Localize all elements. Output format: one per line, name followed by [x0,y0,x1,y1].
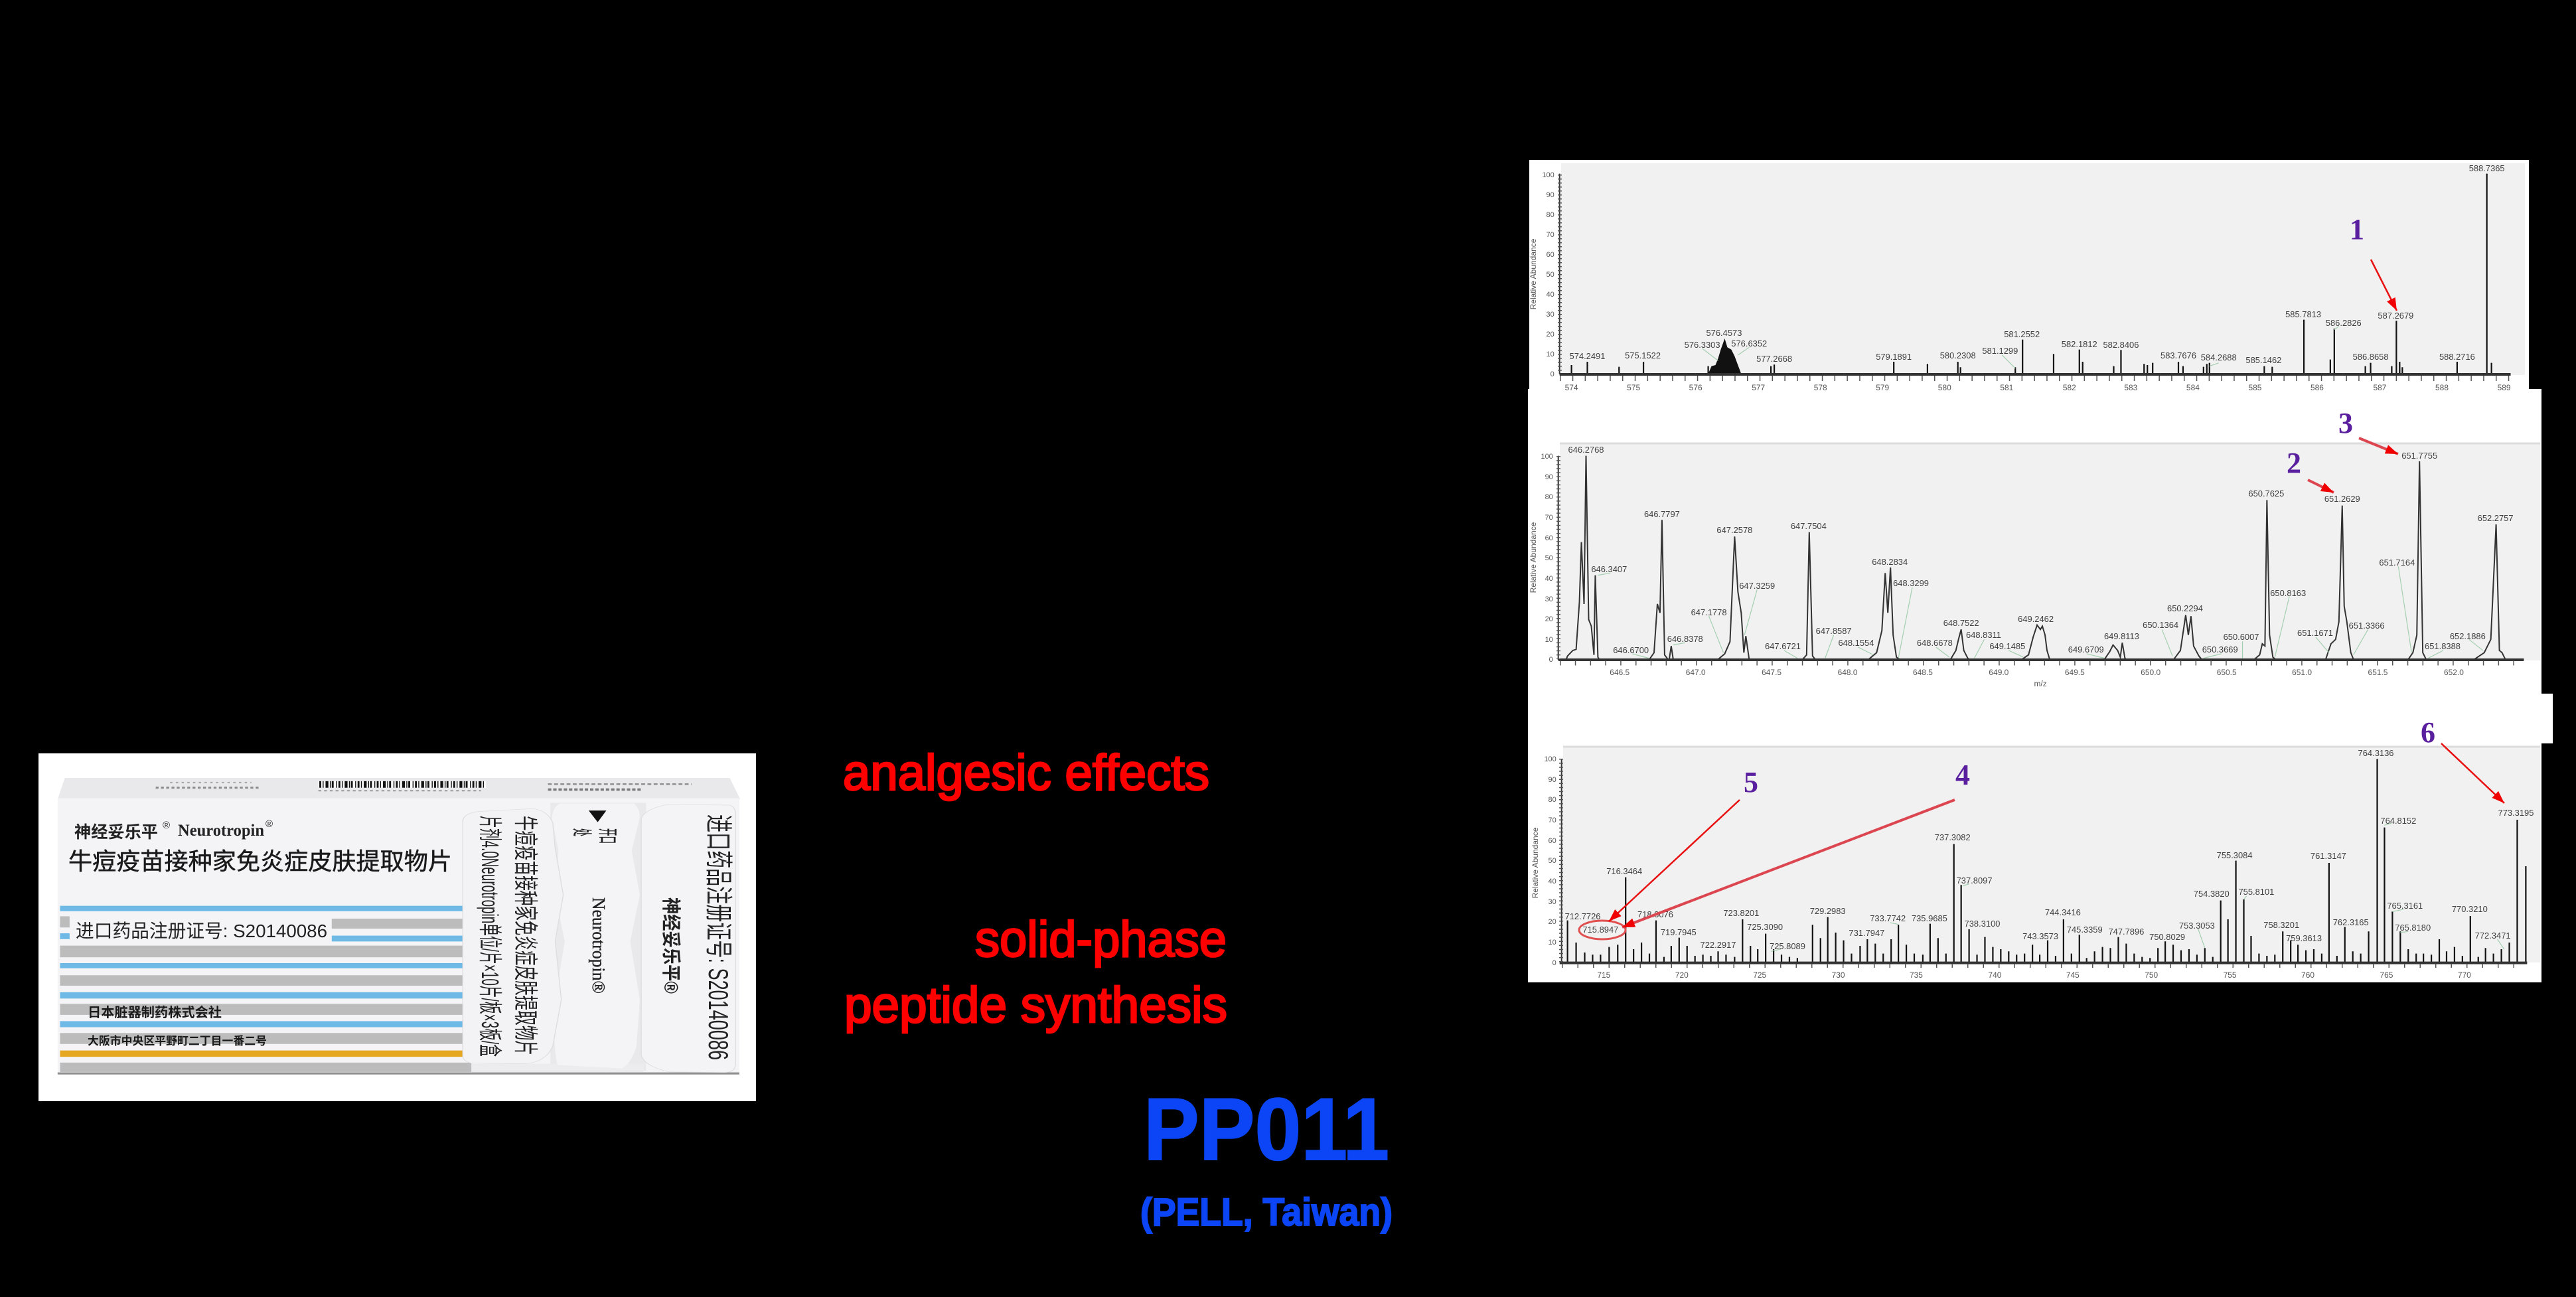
chart: mass spectrum 2 (m/z 646-652): 647.7504 [1791,521,1827,531]
chart: mass spectrum 1 (m/z 574-589): 579 [1876,383,1890,392]
chart: mass spectrum 2 (m/z 646-652): 647.5 [1762,668,1781,677]
chart: mass spectrum 1 (m/z 574-589): 60 [1547,251,1554,259]
chart: mass spectrum 3 (m/z 715-773): 765.8180 [2395,923,2431,933]
chart: mass spectrum 2 (m/z 646-652): 20 [1545,615,1553,623]
callout: peak 1: 1 [2350,213,2364,246]
chart: mass spectrum 3 (m/z 715-773): 80 [1549,796,1556,804]
chart: mass spectrum 3 (m/z 715-773): 100 [1544,755,1556,763]
flap text: product name: 牛痘疫苗接种家免炎症皮肤提取物片 [512,816,539,1055]
chart: mass spectrum 2 (m/z 646-652): 650.3669 [2202,645,2238,654]
chart: mass spectrum 3 (m/z 715-773): 735 [1910,970,1923,980]
callout: peak 2 [2287,447,2334,493]
chart: mass spectrum 1 (m/z 574-589): 586 [2311,383,2324,392]
chart: mass spectrum 3 (m/z 715-773): 754.3820 [2194,889,2230,899]
chart: mass spectrum 2 (m/z 646-652): 650.2294 [2167,603,2203,613]
subtitle: PELL, Taiwan: (PELL, Taiwan) [1140,1191,1393,1234]
chart: mass spectrum 2 (m/z 646-652): 652.1886 [2450,631,2486,641]
chart: mass spectrum 3 (m/z 715-773): 770 [2458,970,2471,980]
callout: peak 5 [1609,766,1758,921]
callout: peak 5: 5 [1744,766,1758,799]
chart: mass spectrum 2 (m/z 646-652): 648.3299 [1893,578,1929,588]
chart: mass spectrum 2 (m/z 646-652): 650.0 [2141,668,2161,677]
chart: mass spectrum 3 (m/z 715-773): 758.3201 [2263,920,2299,930]
title: PP011: PP011 [1144,1081,1389,1179]
chart: mass spectrum 2 (m/z 646-652): 649.6709 [2068,645,2104,654]
chart: mass spectrum 3 (m/z 715-773): 750.8029 [2149,932,2185,942]
chart: mass spectrum 3 (m/z 715-773): 764.3136 [2358,748,2393,758]
chart: mass spectrum 1 (m/z 574-589): 585 [2248,383,2262,392]
chart: mass spectrum 2 (m/z 646-652): 649.5 [2065,668,2085,677]
chart: mass spectrum 2 (m/z 646-652): 651.5 [2368,668,2388,677]
chart: mass spectrum 3 (m/z 715-773): 20 [1549,918,1556,926]
chart: mass spectrum 3 (m/z 715-773): 762.3165 [2333,917,2369,927]
chart: mass spectrum 2 (m/z 646-652): 0 [1549,656,1553,664]
panel: mass spectra background [1528,160,2553,982]
callout: peak 4 [1622,759,1970,927]
chart: mass spectrum 2 (m/z 646-652): 652.2757 [2478,513,2514,523]
chart: mass spectrum 2 (m/z 646-652): 646.5 [1610,668,1630,677]
chart: mass spectrum 3 (m/z 715-773): 733.7742 [1870,913,1906,923]
chart: mass spectrum 3 (m/z 715-773): 723.8201 [1723,908,1759,918]
chart: mass spectrum 1 (m/z 574-589): 577.2668 [1756,354,1792,364]
chart: mass spectrum 1 (m/z 574-589): 582.1812 [2062,339,2097,349]
chart: mass spectrum 2 (m/z 646-652): m/z [2034,679,2047,688]
chart: mass spectrum 1 (m/z 574-589): 581.2552 [2004,329,2040,339]
chart: mass spectrum 3 (m/z 715-773): 718.3076 [1637,909,1673,919]
flap text: registration number: 进口药品注册证号: S20140086 [703,814,734,1060]
chart: mass spectrum 2 (m/z 646-652): 649.2462 [2018,614,2054,624]
chart: mass spectrum 3 (m/z 715-773): 715 [1597,970,1611,980]
chart: mass spectrum 1 (m/z 574-589): 587.2679 [2378,311,2413,321]
address: 大阪市中央区平野町二丁目一番二号 [88,1034,267,1047]
chart: mass spectrum 2 (m/z 646-652): 651.8388 [2425,641,2461,651]
chart: mass spectrum 1 (m/z 574-589): 0 [1551,370,1554,378]
chart: mass spectrum 3 (m/z 715-773): 760 [2301,970,2314,980]
chart: mass spectrum 1 (m/z 574-589): 586.2826 [2326,318,2362,328]
chart: mass spectrum 1 (m/z 574-589): 576.4573 [1706,328,1742,338]
callout: peak 6 [2421,716,2504,803]
callout: peak 3: 3 [2338,407,2353,439]
chart: mass spectrum 3 (m/z 715-773): 744.3416 [2045,907,2081,917]
chart: mass spectrum 1 (m/z 574-589): 30 [1547,311,1554,319]
chart: mass spectrum 2 (m/z 646-652): 652.0 [2444,668,2464,677]
brand name [74,818,273,842]
chart: mass spectrum 1 (m/z 574-589): 581.1299 [1982,346,2018,356]
text: solid-phase peptide synthesis [844,911,1227,1033]
chart: mass spectrum 3 (m/z 715-773): 722.2917 [1701,940,1736,950]
brand name: ® [163,820,170,831]
chart: mass spectrum 1 (m/z 574-589): Relative Abundance [1529,238,1538,309]
chart: mass spectrum 2 (m/z 646-652): 70 [1545,514,1553,522]
chart: mass spectrum 3 (m/z 715-773): 745.3359 [2067,925,2103,935]
chart: mass spectrum 3 (m/z 715-773): 764.8152 [2380,816,2416,826]
chart: mass spectrum 2 (m/z 646-652): 646.8378 [1667,634,1703,644]
chart: mass spectrum 3 (m/z 715-773): 737.3082 [1935,832,1971,842]
chart: mass spectrum 1 (m/z 574-589): 588.7365 [2469,163,2505,173]
chart: mass spectrum 1 (m/z 574-589): 586.8658 [2353,352,2389,362]
chart: mass spectrum 1 (m/z 574-589): 588.2716 [2439,352,2475,362]
chart: mass spectrum 2 (m/z 646-652): 648.5 [1913,668,1933,677]
flap text: Neurotropin: Neurotropin® [589,897,609,994]
chart: mass spectrum 3 (m/z 715-773): 725 [1753,970,1766,980]
chart: mass spectrum 2 (m/z 646-652): 651.0 [2292,668,2312,677]
chart: mass spectrum 3 (m/z 715-773): 772.3471 [2475,931,2511,941]
panel: Neurotropin medicine box photo: 开口 [596,828,618,844]
chart: mass spectrum 2 (m/z 646-652): 650.6007 [2224,632,2259,642]
chart: mass spectrum 3 (m/z 715-773): 731.7947 [1849,928,1884,938]
callout: peak 6: 6 [2421,716,2435,749]
chart: mass spectrum 1 (m/z 574-589): 589 [2498,383,2511,392]
chart: mass spectrum 1 (m/z 574-589): 581 [2000,383,2014,392]
chart: mass spectrum 3 (m/z 715-773): 40 [1549,877,1556,885]
chart: mass spectrum 3 (m/z 715-773): 773.3195 [2498,808,2534,818]
chart: mass spectrum 3 (m/z 715-773): 720 [1675,970,1689,980]
chart: mass spectrum 1 (m/z 574-589): 584 [2186,383,2200,392]
chart: mass spectrum 3 (m/z 715-773): 765 [2380,970,2393,980]
flap text: brand: 神经妥乐平® [660,897,682,994]
chart: mass spectrum 2 (m/z 646-652): 648.7522 [1943,618,1979,628]
chart: mass spectrum 3 (m/z 715-773): 759.3613 [2286,933,2322,943]
chart: mass spectrum 1 (m/z 574-589): 70 [1547,231,1554,239]
chart: mass spectrum 2 (m/z 646-652): 651.1671 [2297,628,2333,638]
chart: mass spectrum 3 (m/z 715-773): 729.2983 [1810,906,1846,916]
callout: circle around peak 5 [1579,921,1626,939]
callout: peak 3 [2338,407,2398,454]
chart: mass spectrum 3 (m/z 715-773): 735.9685 [1912,913,1947,923]
chart: mass spectrum 1 (m/z 574-589): 50 [1547,271,1554,279]
chart: mass spectrum 2 (m/z 646-652): 100 [1541,453,1553,461]
chart: mass spectrum 1 (m/z 574-589): 585.1462 [2245,355,2281,365]
brand name: Neurotropin [178,822,264,840]
chart: mass spectrum 2 (m/z 646-652): 648.1554 [1839,638,1874,648]
chart: mass spectrum 1 (m/z 574-589): 580.2308 [1940,350,1976,360]
flap text: open here [570,828,618,844]
chart: mass spectrum 3 (m/z 715-773): 761.3147 [2311,851,2346,861]
chart: mass spectrum 3 (m/z 715-773): 30 [1549,898,1556,906]
chart: mass spectrum 2 (m/z 646-652): 40 [1545,575,1553,583]
chart: mass spectrum 1 (m/z 574-589): 582 [2063,383,2076,392]
chart: mass spectrum 3 (m/z 715-773): Relative Abundance [1531,827,1540,898]
chart: mass spectrum 2 (m/z 646-652): 10 [1545,636,1553,644]
chart: mass spectrum 2 (m/z 646-652): 80 [1545,493,1553,501]
chart: mass spectrum 1 (m/z 574-589): 583 [2124,383,2138,392]
chart: mass spectrum 1 (m/z 574-589): 90 [1547,191,1554,199]
chart: mass spectrum 2 (m/z 646-652): 649.1485 [1989,641,2025,651]
chart: mass spectrum 1 (m/z 574-589): 578 [1814,383,1827,392]
chart: mass spectrum 3 (m/z 715-773): 716.3464 [1606,866,1642,876]
chart: mass spectrum 2 (m/z 646-652): 90 [1545,473,1553,481]
chart: mass spectrum 1 (m/z 574-589): 580 [1938,383,1951,392]
chart: mass spectrum 1 (m/z 574-589): 579.1891 [1876,352,1912,362]
chart: mass spectrum 1 (m/z 574-589): 575.1522 [1625,350,1661,360]
chart: mass spectrum 3 (m/z 715-773): 755.8101 [2238,887,2274,897]
chart: mass spectrum 2 (m/z 646-652): 649.8113 [2104,631,2139,641]
chart: mass spectrum 3 (m/z 715-773): 50 [1549,857,1556,865]
chart: mass spectrum 3 (m/z 715-773): 60 [1549,837,1556,845]
chart: mass spectrum 3 (m/z 715-773): 745 [2066,970,2080,980]
chart: mass spectrum 2 (m/z 646-652): 30 [1545,595,1553,603]
chart: mass spectrum 3 (m/z 715-773): 737.8097 [1957,876,1993,885]
chart: mass spectrum 2 (m/z 646-652): 650.8163 [2270,588,2306,598]
chart: mass spectrum 3 (m/z 715-773): 730 [1832,970,1845,980]
text: solid-phase peptide synthesis: solid-phase [975,911,1227,968]
registration number: 进口药品注册证号: S20140086 [76,921,327,941]
chart: mass spectrum 1 (m/z 574-589): 585.7813 [2285,309,2321,319]
chart: mass spectrum 1 (m/z 574-589): 576.6352 [1731,339,1767,348]
flap text: open here: 处 [570,828,592,836]
chart: mass spectrum 1 (m/z 574-589): 576.3303 [1685,340,1720,350]
chart: mass spectrum 1 (m/z 574-589): 574 [1565,383,1578,392]
chart: mass spectrum 1 (m/z 574-589): 10 [1547,350,1554,358]
chart: mass spectrum 2 (m/z 646-652): 648.8311 [1966,630,2001,640]
chart: mass spectrum 2 (m/z 646-652): 646.3407 [1591,564,1627,574]
callout: peak 4: 4 [1955,759,1970,791]
chart: mass spectrum 2 (m/z 646-652): 650.7625 [2248,489,2284,498]
flap text: specification: 片剂4.0Neurotropin单位/片×10片/板×3板/盒 [477,816,504,1057]
chart: mass spectrum 3 (m/z 715-773): 755.3084 [2217,850,2253,860]
chart: mass spectrum 1 (m/z 574-589): 574.2491 [1570,351,1605,361]
chart: mass spectrum 2 (m/z 646-652): 648.0 [1838,668,1858,677]
chart: mass spectrum 2 (m/z 646-652): 647.2578 [1716,525,1752,535]
chart: mass spectrum 2 (m/z 646-652): 650.5 [2217,668,2237,677]
chart: mass spectrum 2 (m/z 646-652): 647.3259 [1739,581,1775,591]
chart: mass spectrum 3 (m/z 715-773): 10 [1549,939,1556,947]
callout: peak 1 [2350,213,2397,311]
chart: mass spectrum 3 (m/z 715-773): 743.3573 [2022,931,2058,941]
chart: mass spectrum 1 (m/z 574-589): 20 [1547,331,1554,339]
chart: mass spectrum 2 (m/z 646-652): 651.7755 [2401,451,2437,461]
chart: mass spectrum 2 (m/z 646-652): 648.2834 [1872,557,1908,567]
brand name: ® [265,818,273,830]
chart: mass spectrum 2 (m/z 646-652) [1529,407,2540,688]
chart: mass spectrum 2 (m/z 646-652): 646.2768 [1568,445,1604,455]
chart: mass spectrum 2 (m/z 646-652): 646.7797 [1644,509,1680,519]
chart: mass spectrum 3 (m/z 715-773): 740 [1988,970,2002,980]
chart: mass spectrum 2 (m/z 646-652): 50 [1545,554,1553,562]
chart: mass spectrum 2 (m/z 646-652): 650.1364 [2143,620,2178,630]
text: solid-phase peptide synthesis: peptide synthesis [844,977,1227,1033]
chart: mass spectrum 3 (m/z 715-773): 719.7945 [1661,927,1697,937]
chart: mass spectrum 2 (m/z 646-652): 651.7164 [2379,558,2415,568]
chart: mass spectrum 2 (m/z 646-652): 649.0 [1989,668,2009,677]
chart: mass spectrum 1 (m/z 574-589): 80 [1547,211,1554,219]
chart: mass spectrum 1 (m/z 574-589): 576 [1689,383,1703,392]
chart: mass spectrum 1 (m/z 574-589): 100 [1542,171,1554,179]
chart: mass spectrum 2 (m/z 646-652): 646.6700 [1613,645,1649,655]
manufacturer: 日本脏器制药株式会社 [88,1005,222,1020]
chart: mass spectrum 3 (m/z 715-773): 725.8089 [1770,941,1805,951]
chart: mass spectrum 1 (m/z 574-589): 40 [1547,291,1554,299]
chart: mass spectrum 2 (m/z 646-652): 647.6721 [1765,641,1801,651]
chart: mass spectrum 2 (m/z 646-652): 647.8587 [1816,626,1852,636]
brand name: 神经妥乐平 [74,823,158,842]
callout: peak 2: 2 [2287,447,2301,479]
chart: mass spectrum 2 (m/z 646-652): 60 [1545,534,1553,542]
chart: mass spectrum 3 (m/z 715-773): 725.3090 [1747,922,1783,932]
chart: mass spectrum 3 (m/z 715-773) [1531,716,2540,980]
text: analgesic effects: analgesic effects [843,745,1209,801]
chart: mass spectrum 2 (m/z 646-652): 651.2629 [2324,494,2360,504]
chart: mass spectrum 3 (m/z 715-773): 753.3053 [2179,921,2215,931]
chart: mass spectrum 3 (m/z 715-773): 90 [1549,776,1556,784]
panel: Neurotropin medicine box photo [38,753,756,1101]
chart: mass spectrum 3 (m/z 715-773): 750 [2145,970,2159,980]
chart: mass spectrum 2 (m/z 646-652): 647.1778 [1691,607,1727,617]
chart: mass spectrum 2 (m/z 646-652): Relative Abundance [1529,522,1538,593]
chart: mass spectrum 2 (m/z 646-652): 651.3366 [2349,621,2385,631]
chart: mass spectrum 1 (m/z 574-589): 588 [2435,383,2449,392]
chart: mass spectrum 1 (m/z 574-589): 575 [1627,383,1640,392]
chart: mass spectrum 1 (m/z 574-589): 577 [1752,383,1765,392]
chart: mass spectrum 3 (m/z 715-773): 715.8947 [1582,925,1618,935]
chart: mass spectrum 3 (m/z 715-773): 755 [2224,970,2237,980]
chart: mass spectrum 1 (m/z 574-589) [1529,163,2525,392]
chart: mass spectrum 1 (m/z 574-589): 582.8406 [2103,340,2139,350]
chart: mass spectrum 3 (m/z 715-773): 0 [1553,959,1556,967]
chart: mass spectrum 3 (m/z 715-773): 770.3210 [2452,904,2488,914]
chart: mass spectrum 3 (m/z 715-773): 70 [1549,816,1556,824]
chart: mass spectrum 2 (m/z 646-652): 648.6678 [1917,638,1953,648]
chart: mass spectrum 3 (m/z 715-773): 712.7726 [1565,911,1600,921]
chart: mass spectrum 3 (m/z 715-773): 738.3100 [1965,919,2000,929]
chart: mass spectrum 2 (m/z 646-652): 647.0 [1686,668,1706,677]
chart: mass spectrum 3 (m/z 715-773): 747.7896 [2108,927,2144,937]
chart: mass spectrum 1 (m/z 574-589): 587 [2374,383,2387,392]
chart: mass spectrum 1 (m/z 574-589): 583.7676 [2160,350,2196,360]
product name: 牛痘疫苗接种家免炎症皮肤提取物片 [68,848,452,875]
chart: mass spectrum 3 (m/z 715-773): 765.3161 [2387,901,2423,911]
chart: mass spectrum 1 (m/z 574-589): 584.2688 [2201,352,2237,362]
